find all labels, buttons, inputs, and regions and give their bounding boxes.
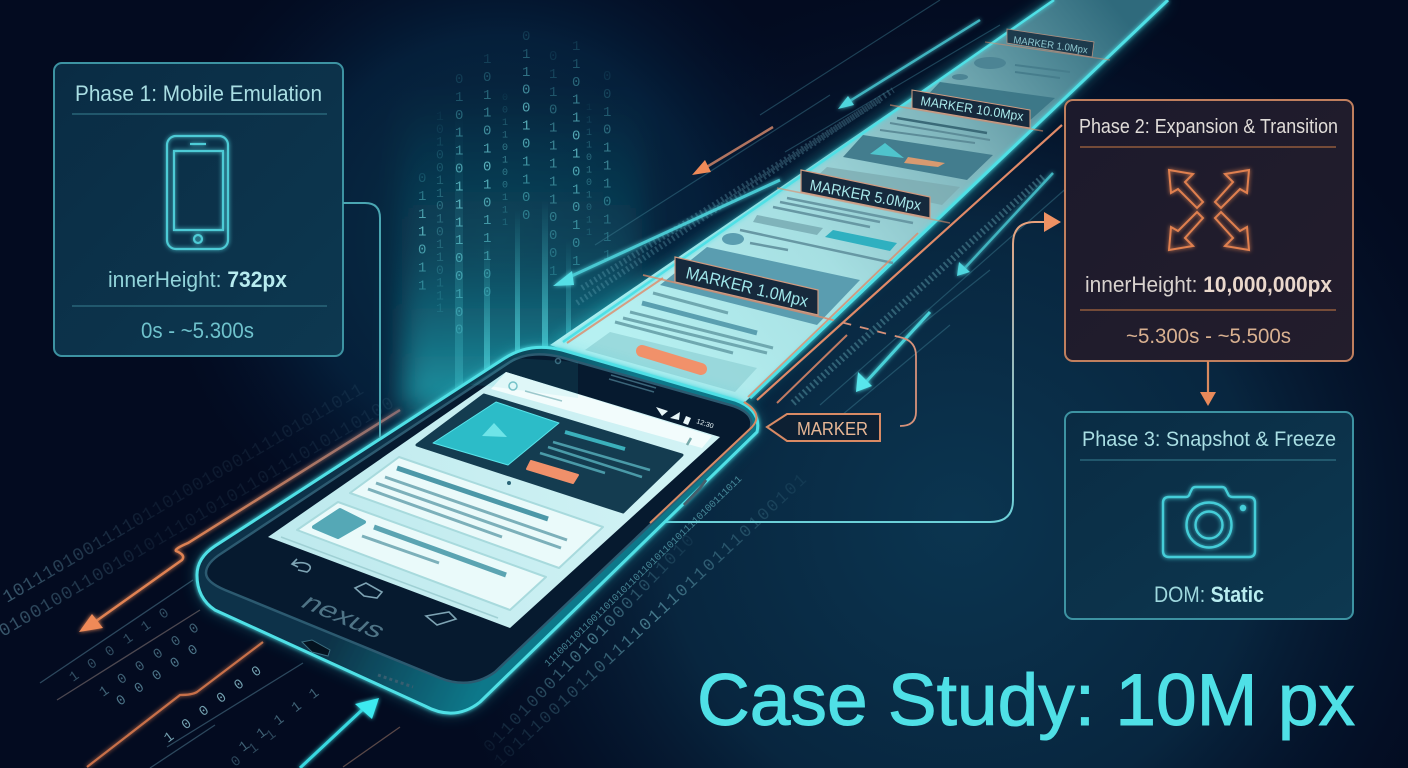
smartphone	[197, 347, 758, 713]
arrow: orange left belt arrow	[692, 127, 773, 175]
binary lanes bottom left: 100110	[67, 598, 184, 686]
carousel dots	[507, 481, 511, 485]
charge port	[302, 640, 330, 656]
innerHeight 732px: innerHeight: 732px	[108, 267, 288, 292]
belt glow	[550, 0, 1168, 402]
hero block	[417, 395, 682, 512]
lane lines bottom left	[40, 580, 400, 768]
icon: expand arrows	[1169, 170, 1249, 250]
title: Case Study: 10M px	[697, 660, 1355, 741]
DOM static: DOM: Static	[1154, 582, 1264, 607]
binary streams left: 101110100111101101001000111101011011	[0, 380, 368, 608]
orange side edge	[650, 402, 756, 523]
vertical binary data beams: 11110101011	[586, 103, 599, 239]
vertical binary data beams: 010110111100100	[455, 72, 473, 339]
vertical binary data beams: 01100101100	[522, 29, 540, 224]
marker tag 5.0Mpx: MARKER 5.0Mpx	[808, 177, 923, 215]
belt surface	[550, 0, 1168, 402]
arrow: cyan right belt arrow lower	[856, 312, 930, 392]
section 2 content	[722, 198, 913, 263]
earpiece and camera	[556, 358, 656, 392]
panel: phase 1	[54, 63, 343, 356]
vertical binary data beams: 0111011	[418, 171, 436, 294]
phase 1 heading: Phase 1: Mobile Emulation	[75, 81, 322, 106]
dashed marker bracket	[825, 318, 916, 426]
vertical binary data beams	[402, 29, 642, 410]
binary streams left: 01001001100101011101010110111010110100	[0, 394, 398, 642]
phone face	[206, 354, 751, 683]
section 1 content	[585, 247, 860, 392]
card 1	[350, 457, 603, 568]
connector: phase 1 to phone	[343, 203, 380, 437]
card 2	[297, 502, 546, 610]
marker callout box	[767, 414, 880, 441]
hero text lines	[565, 432, 625, 449]
orange trace bottom left	[87, 642, 263, 767]
marker tag far 1.0Mpx: MARKER 1.0Mpx	[1013, 35, 1088, 56]
icon: phone	[167, 136, 228, 249]
orange arrow: trace to lower left	[79, 410, 400, 632]
scrolling page belt	[550, 0, 1168, 403]
glass beam over phone top	[470, 358, 578, 398]
status icons: 12:30	[695, 418, 714, 430]
phone body	[197, 347, 758, 713]
vertical binary data beams: 1010011010110111	[436, 109, 449, 316]
binary lanes bottom left: 11111	[236, 677, 333, 756]
section 4 content	[918, 57, 1070, 123]
phone connector to phase 2	[650, 212, 1061, 522]
hero image	[433, 402, 559, 465]
section 3 content	[815, 118, 993, 205]
binary lanes bottom left: 00000	[114, 634, 213, 710]
phase 2 heading: Phase 2: Expansion & Transition	[1079, 116, 1338, 138]
status icons	[656, 407, 714, 430]
belt edges	[563, 0, 1168, 398]
arrow: cyan left belt arrow	[553, 180, 780, 286]
binary streams right of phone: 011010001101010001011010	[481, 532, 699, 757]
panel: phase 3	[1065, 412, 1353, 619]
arrow: cyan right belt arrow upper	[957, 173, 1053, 276]
nav back	[292, 559, 310, 572]
binary lanes bottom left	[67, 598, 333, 768]
nav home	[355, 583, 382, 598]
arrow: cyan far left arrow	[838, 20, 980, 109]
orange measurement lines	[567, 42, 1110, 403]
marker tag 1.0Mpx: MARKER 1.0Mpx	[684, 263, 811, 311]
arrow: phase 2 to phase 3	[1200, 361, 1216, 406]
phase 1 time range: 0s - ~5.300s	[141, 318, 254, 343]
marker callout box: MARKER	[797, 419, 868, 439]
icon: camera	[1163, 487, 1255, 557]
nav recents	[426, 612, 456, 625]
arrow: cyan up toward phone	[300, 698, 379, 768]
innerHeight 10,000,000px: innerHeight: 10,000,000px	[1085, 272, 1333, 297]
vertical binary data beams: 10110101011100	[483, 52, 501, 301]
speaker dots	[378, 675, 413, 687]
orange button	[527, 461, 578, 483]
binary streams right of phone: 1011100101101111011101101110100101	[491, 471, 811, 768]
marker tag 10.0Mpx: MARKER 10.0Mpx	[920, 93, 1025, 124]
play icon	[482, 423, 507, 437]
vertical binary data beams: 00101110111	[603, 69, 621, 264]
phone screen	[268, 372, 720, 628]
vertical binary data beams: 1101101010101	[572, 39, 590, 270]
panel: phase 2	[1065, 100, 1353, 361]
binary lanes bottom left: 100000	[97, 613, 214, 701]
data lines beside the belt	[577, 0, 1070, 425]
binary streams right of phone: 1110011011001101010110110101101011110100111011	[543, 474, 745, 670]
side button	[684, 480, 706, 505]
vertical binary data beams: 00110100111	[502, 93, 515, 229]
phase 3 heading: Phase 3: Snapshot & Freeze	[1082, 428, 1336, 451]
vertical binary data beams: 0110111110001	[549, 49, 567, 280]
phase 2 time range: ~5.300s - ~5.500s	[1126, 325, 1291, 348]
phone glow	[197, 347, 758, 713]
search bar	[491, 372, 712, 448]
binary lanes bottom left: 100000	[161, 655, 276, 747]
nexus logo: nexus	[295, 590, 392, 643]
